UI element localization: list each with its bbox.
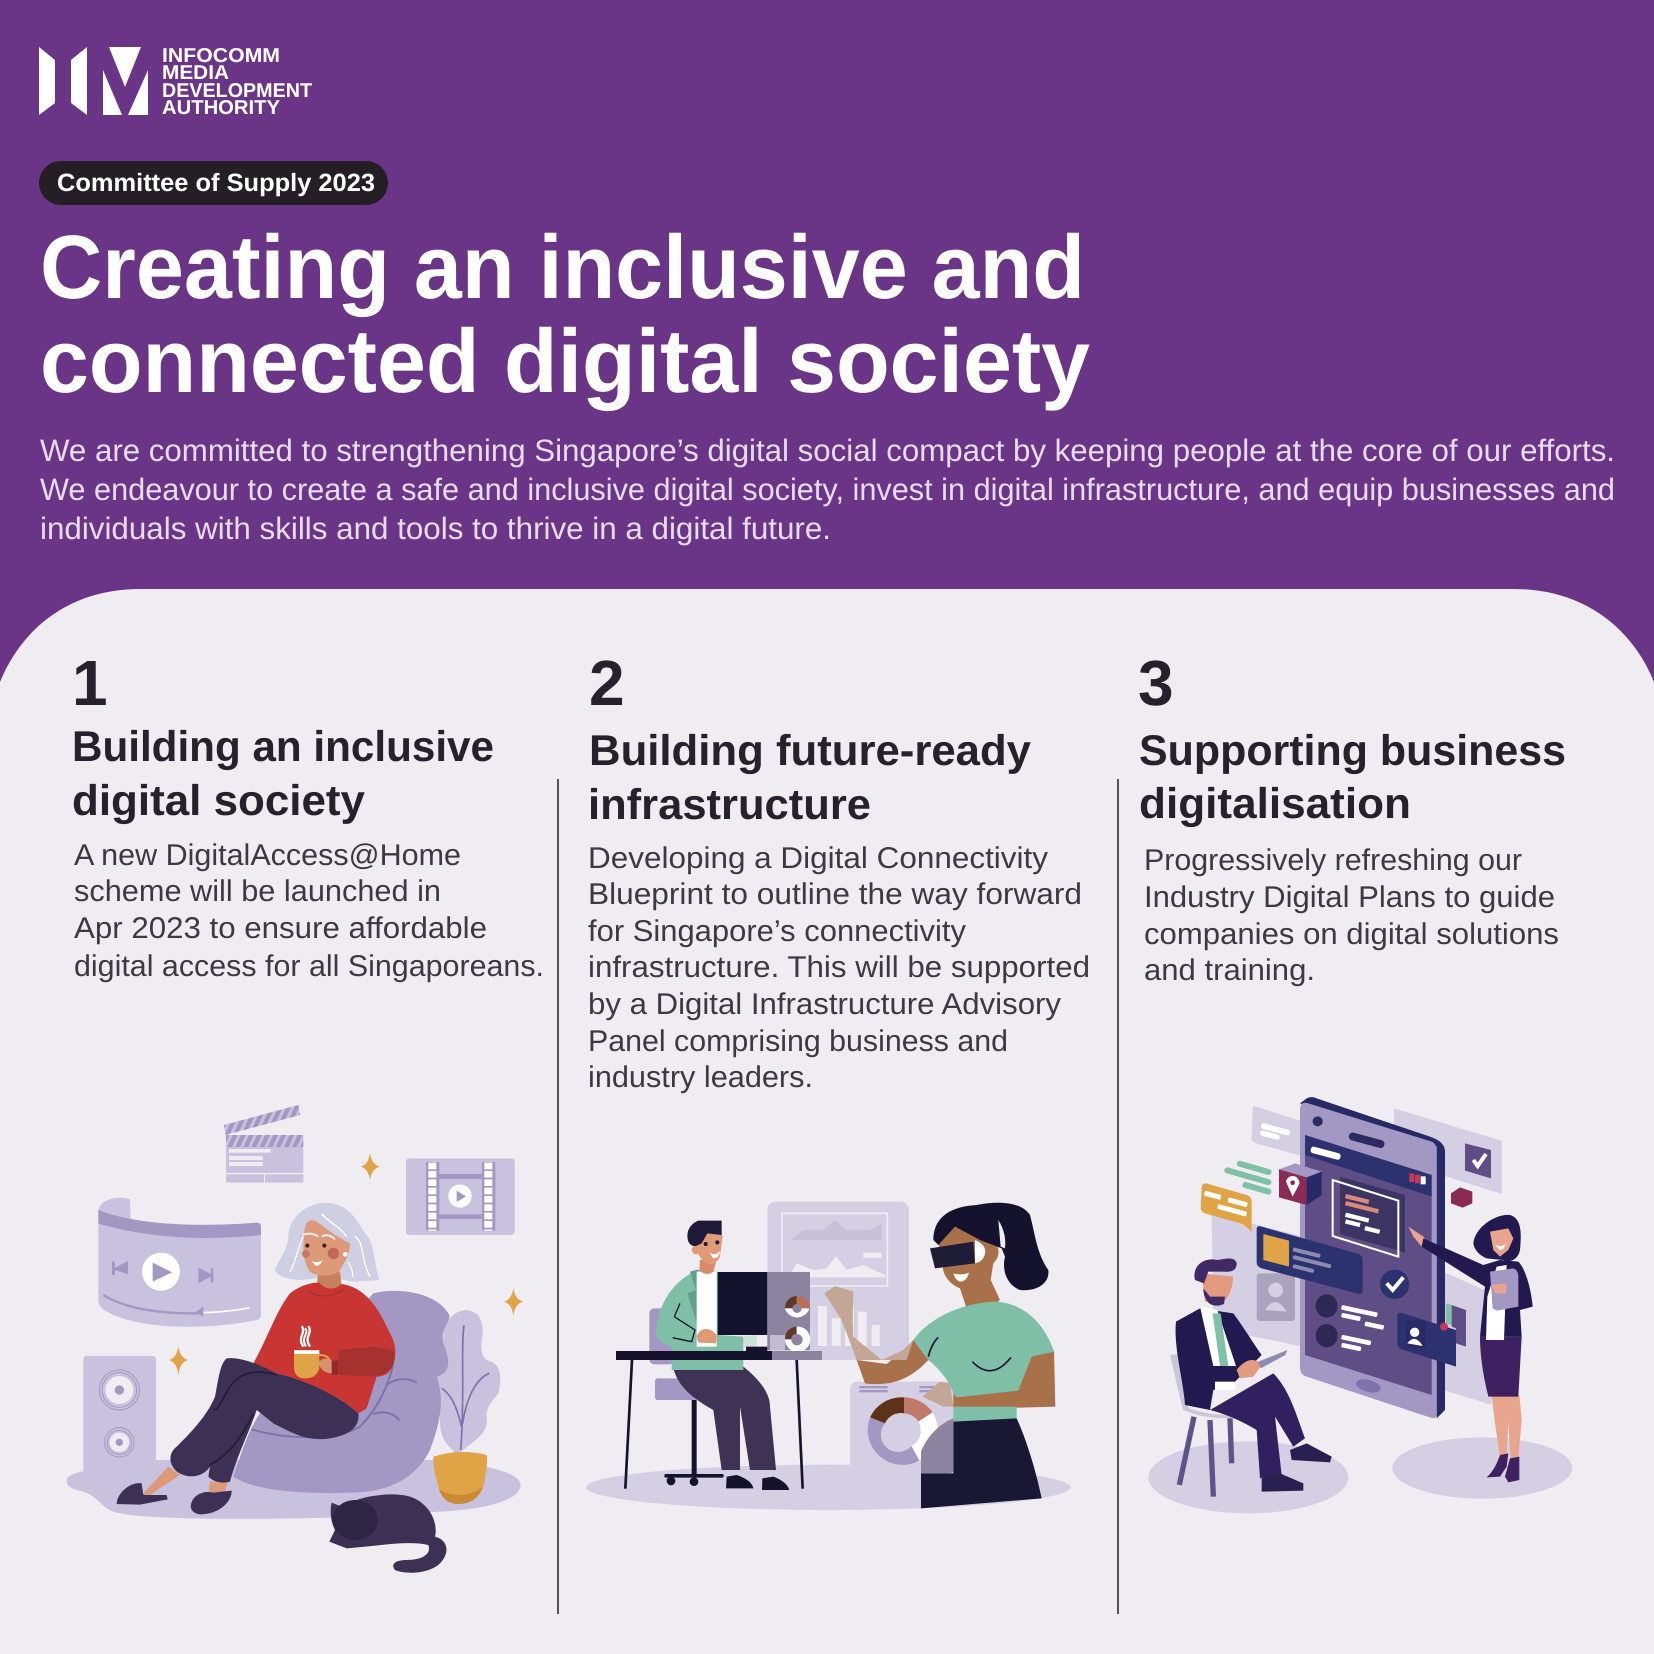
- title: Creating an inclusive and: [40, 218, 1085, 318]
- office chair: [649, 1308, 724, 1486]
- column 2: future-ready infrastructure text: infrastructure: [588, 781, 871, 829]
- column 3: business digitalisation text: companies on digital solutions: [1144, 918, 1559, 951]
- logo: Infocomm Media Development Authority: INFOCOMM: [162, 45, 280, 67]
- panel: light content area: [0, 589, 1654, 1654]
- column 1: inclusive digital society text: scheme will be launched in: [74, 875, 441, 908]
- logo: Infocomm Media Development Authority: MEDIA: [162, 62, 229, 84]
- logo: Infocomm Media Development Authority: [39, 45, 312, 119]
- column 1: inclusive digital society text: digital society: [72, 777, 365, 825]
- column 2: future-ready infrastructure text: by a Digital Infrastructure Advisory: [588, 988, 1061, 1021]
- chair: [1170, 1353, 1253, 1497]
- column 1: inclusive digital society text: A new DigitalAccess@Home: [74, 839, 461, 872]
- column 1: inclusive digital society text: Building an inclusive: [72, 723, 494, 771]
- column 1: inclusive digital society text: [72, 647, 544, 983]
- icon: curved video player: [98, 1198, 261, 1327]
- divider between columns 1 and 2: [557, 779, 559, 1614]
- profile card: [1397, 1303, 1466, 1367]
- column 3: business digitalisation text: Progressively refreshing our: [1144, 844, 1522, 877]
- column 2: future-ready infrastructure text: for Singapore’s connectivity: [588, 915, 966, 948]
- divider between columns 2 and 3: [1117, 779, 1119, 1614]
- cat: [329, 1494, 446, 1573]
- title: connected digital society: [40, 312, 1090, 412]
- intro text: We endeavour to create a safe and inclusive digital society, invest in digital infrastructure, and equip businesses and: [40, 472, 1615, 507]
- column 1: inclusive digital society text: 1: [72, 647, 108, 719]
- column 3: business digitalisation text: and training.: [1144, 954, 1315, 987]
- small donut charts on monitor: [785, 1296, 810, 1352]
- title: [40, 218, 1090, 412]
- translucent hands and forearm over the panels: [824, 1286, 953, 1407]
- column 1: inclusive digital society text: Apr 2023 to ensure affordable: [74, 912, 487, 945]
- column 2: future-ready infrastructure text: 2: [589, 647, 625, 719]
- woman with VR headset: [857, 1203, 1055, 1508]
- illustration: woman relaxing on bean bag with media: [67, 1105, 523, 1573]
- decorative floating items: [1224, 1123, 1491, 1321]
- icon: film card: [406, 1158, 515, 1235]
- column 2: future-ready infrastructure text: Blueprint to outline the way forward: [588, 878, 1082, 911]
- column 2: future-ready infrastructure text: industry leaders.: [588, 1061, 813, 1094]
- logo: Infocomm Media Development Authority: DEVELOPMENT: [162, 80, 312, 102]
- column 2: future-ready infrastructure text: Panel comprising business and: [588, 1025, 1008, 1058]
- plant in pot: [430, 1310, 500, 1504]
- standing woman presenter: [1408, 1215, 1533, 1482]
- icon: clapperboard: [224, 1105, 303, 1183]
- seated man: [656, 1221, 789, 1490]
- column 2: future-ready infrastructure text: [588, 647, 1090, 1094]
- intro text: We are committed to strengthening Singapore’s digital social compact by keeping people at the core of our efforts.: [40, 433, 1615, 468]
- illustration: business people with giant smartphone: [1148, 1097, 1572, 1513]
- ground ellipses: [1148, 1441, 1348, 1513]
- woman: [117, 1203, 395, 1514]
- desk: [616, 1351, 822, 1489]
- bean bag: [233, 1291, 449, 1493]
- column 1: inclusive digital society text: digital access for all Singaporeans.: [74, 950, 544, 983]
- column 3: business digitalisation text: Industry Digital Plans to guide: [1144, 881, 1555, 914]
- intro text: [40, 433, 1615, 546]
- column 3: business digitalisation text: digitalisation: [1139, 780, 1411, 828]
- location cube: [1279, 1163, 1322, 1205]
- seated man in suit: [1176, 1259, 1332, 1492]
- giant smartphone: [1257, 1097, 1445, 1418]
- floor shape: [67, 1460, 521, 1519]
- illustration: man at desk and woman in VR headset: [586, 1202, 1071, 1510]
- holographic dashboard panel: [767, 1202, 909, 1360]
- floating background cards: [1212, 1106, 1502, 1405]
- intro text: individuals with skills and tools to thrive in a digital future.: [40, 511, 831, 546]
- column 3: business digitalisation text: [1138, 647, 1566, 987]
- icon: sparkles: [169, 1153, 523, 1375]
- speech bubble: [1201, 1183, 1252, 1232]
- column 2: future-ready infrastructure text: Building future-ready: [589, 727, 1031, 775]
- logo: Infocomm Media Development Authority: AUTHORITY: [162, 97, 281, 119]
- icon: speaker: [83, 1356, 156, 1473]
- floor ellipse: [586, 1465, 1071, 1510]
- badge: Committee of Supply 2023: Committee of Supply 2023: [57, 169, 375, 197]
- lower donut chart card: [850, 1382, 953, 1473]
- column 3: business digitalisation text: 3: [1138, 647, 1174, 719]
- column 3: business digitalisation text: Supporting business: [1139, 727, 1566, 775]
- column 2: future-ready infrastructure text: Developing a Digital Connectivity: [588, 842, 1048, 875]
- column 2: future-ready infrastructure text: infrastructure. This will be supported: [588, 951, 1090, 984]
- desktop monitor: [718, 1272, 810, 1351]
- badge: Committee of Supply 2023: [39, 161, 388, 205]
